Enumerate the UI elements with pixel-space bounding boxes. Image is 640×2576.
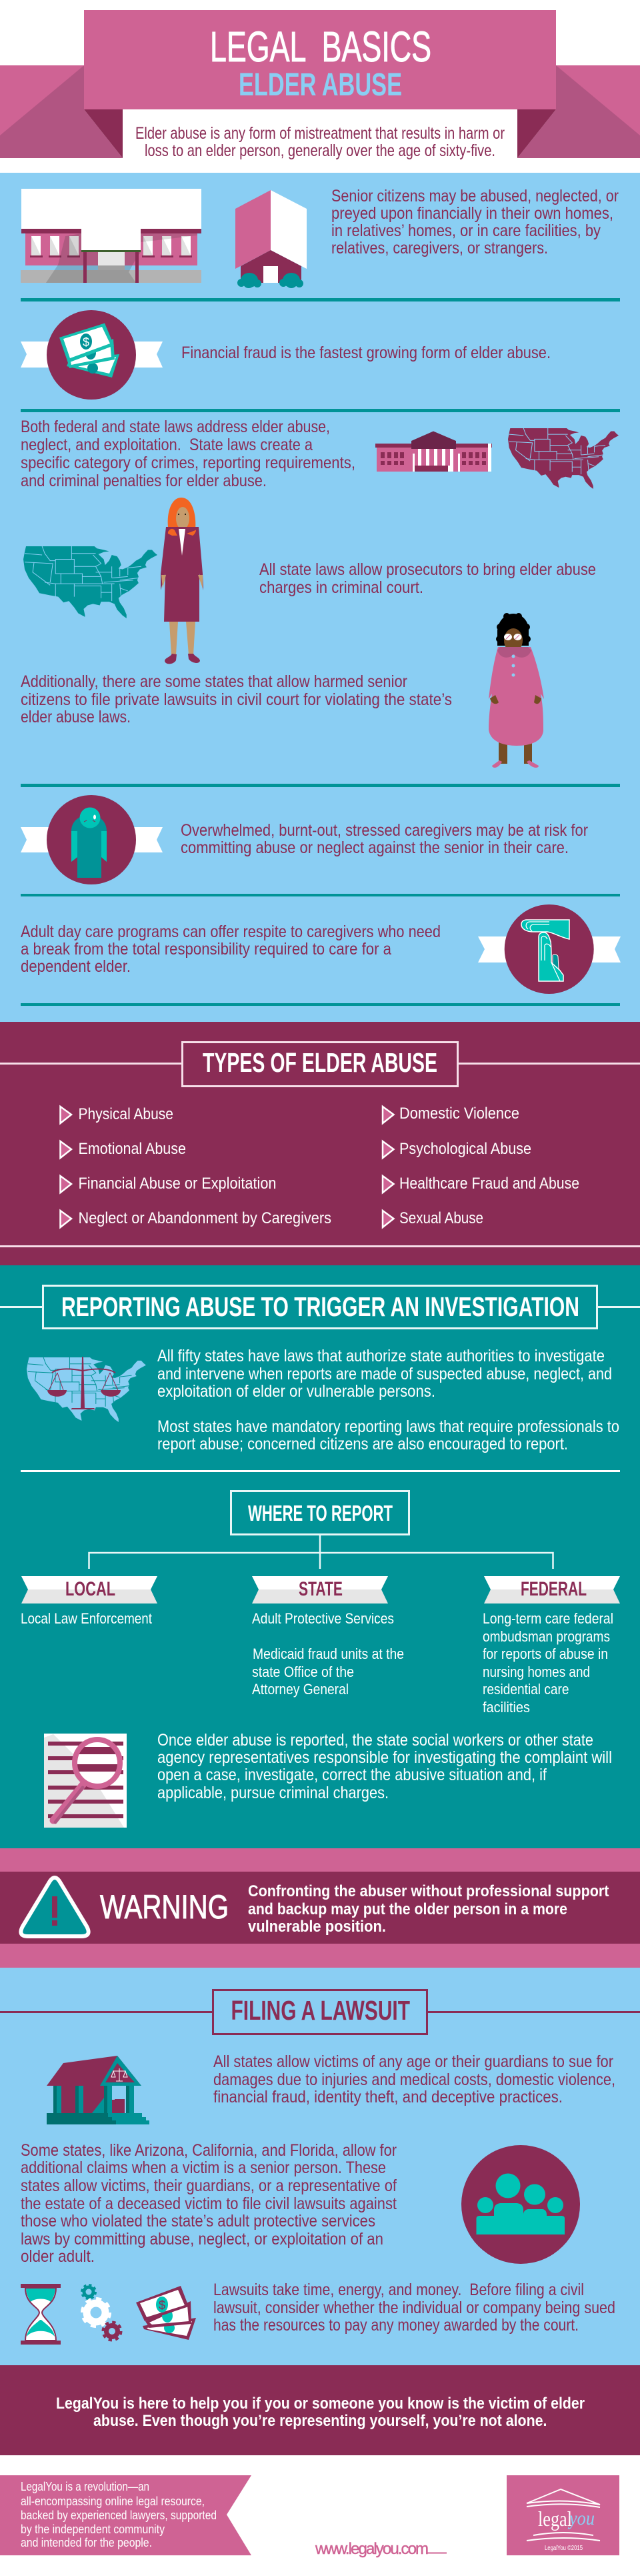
text: prosecutors: All state laws allow prosecutors to bring elder abuse	[259, 560, 596, 579]
callout: legalyou is here to help	[56, 2395, 585, 2430]
text: senior citizens	[331, 187, 619, 257]
footer ribbon	[0, 2475, 251, 2555]
logo: LegalYou ©2015	[545, 2545, 583, 2552]
text: warning: Confronting the abuser without professional support	[248, 1882, 609, 1900]
text: prosecutors: charges in criminal court.	[259, 578, 423, 597]
text: fifty states: exploitation of elder or vulnerable persons.	[157, 1382, 435, 1401]
text: lawsuits take time: has the resources to pay any money awarded by the court.	[213, 2316, 579, 2335]
text: private lawsuits	[21, 672, 452, 726]
list: left column	[60, 1105, 331, 1227]
heading: where to report	[231, 1491, 409, 1534]
text: all states allow victims	[213, 2052, 615, 2106]
badge: money	[21, 310, 163, 400]
banner: federal: FEDERAL	[521, 1578, 587, 1600]
text: private lawsuits: elder abuse laws.	[21, 708, 131, 726]
icon: money stack: $	[159, 2299, 165, 2312]
header ribbon	[0, 10, 640, 158]
badge: helping hand	[478, 904, 621, 994]
text: federal and state laws: specific category of crimes, reporting requirements,	[21, 454, 355, 472]
text: adult day care	[21, 922, 441, 976]
icon: warning triangle	[21, 1878, 89, 1936]
text: lawsuits take time: Lawsuits take time, energy, and money. Before filing a civil	[213, 2281, 584, 2299]
title: ELDER ABUSE	[239, 67, 402, 103]
text: warning: and backup may put the older person in a more	[248, 1900, 567, 1918]
figure: woman in maroon suit	[161, 498, 203, 664]
badge: money: $	[83, 336, 89, 349]
banner: federal	[484, 1576, 620, 1603]
title	[210, 23, 431, 103]
icon: document with magnifier	[44, 1734, 127, 1828]
text: additional claims: laws by committing abuse, neglect, or exploitation of an	[21, 2230, 383, 2248]
figure: woman in pink dress	[489, 613, 544, 768]
footer ribbon: by the independent community	[21, 2523, 165, 2536]
footer ribbon: backed by experienced lawyers, supported	[21, 2509, 217, 2522]
list: left column: Neglect or Abandonment by Caregivers	[79, 1209, 331, 1227]
banner: local	[21, 1576, 157, 1603]
text: additional claims	[21, 2141, 397, 2266]
text: federal and state laws: and criminal penalties for elder abuse.	[21, 472, 267, 490]
text: additional claims: the estate of a deceased victim to file civil lawsuits against	[21, 2194, 397, 2213]
heading: where to report: WHERE TO REPORT	[248, 1501, 393, 1525]
icon: teal US map	[23, 546, 157, 618]
footer ribbon: LegalYou is a revolution—an	[21, 2480, 149, 2493]
heading: filing a lawsuit	[0, 1990, 640, 2034]
connector lines	[89, 1535, 553, 1569]
text: state column: Adult Protective Services	[252, 1610, 394, 1627]
text: private lawsuits: Additionally, there are some states that allow harmed senior	[21, 672, 407, 691]
icon: care facility building	[21, 189, 201, 283]
intro text	[135, 124, 505, 160]
text: state column: Medicaid fraud units at the	[253, 1646, 404, 1662]
badge: stressed caregiver	[21, 795, 163, 884]
banner: state	[252, 1576, 388, 1603]
text: federal column: facilities	[483, 1699, 530, 1716]
text: federal and state laws: neglect, and exploitation. State laws create a	[21, 436, 313, 454]
text: caregivers	[181, 821, 588, 857]
icon: maroon US map	[508, 428, 619, 489]
intro text: Elder abuse is any form of mistreatment that results in harm or	[135, 124, 505, 143]
text: federal column: Long-term care federal	[483, 1610, 613, 1627]
heading: filing a lawsuit: FILING A LAWSUIT	[231, 1995, 410, 2026]
list: right column: Sexual Abuse	[399, 1209, 483, 1227]
list: right column: Healthcare Fraud and Abuse	[399, 1175, 579, 1193]
icon: gears	[81, 2285, 121, 2340]
website url: www.legalyou.com	[315, 2540, 429, 2558]
text: additional claims: additional claims when a victim is a senior person. These	[21, 2158, 386, 2177]
text: warning	[248, 1882, 609, 1936]
text: all states allow victims: financial fraud, identity theft, and deceptive practices.	[213, 2088, 563, 2106]
text: federal column: nursing homes and	[483, 1664, 590, 1680]
text: once reported: applicable, pursue criminal charges.	[157, 1784, 389, 1802]
logo	[507, 2475, 619, 2555]
text: adult day care: a break from the total responsibility required to care for a	[21, 940, 391, 958]
list: right column	[383, 1105, 579, 1227]
text: additional claims: older adult.	[21, 2247, 95, 2266]
icon: hourglass	[21, 2284, 61, 2345]
banner: state: STATE	[299, 1578, 343, 1600]
text: state column: Attorney General	[252, 1681, 349, 1698]
text: federal column: residential care	[483, 1681, 569, 1698]
footer ribbon: all-encompassing online legal resource,	[21, 2495, 205, 2508]
icon: house	[235, 190, 307, 288]
text: warning: vulnerable position.	[248, 1918, 386, 1936]
title: LEGAL BASICS	[210, 23, 431, 71]
text: caregivers: committing abuse or neglect against the senior in their care.	[181, 838, 569, 857]
banner: local: LOCAL	[65, 1578, 115, 1600]
text: additional claims: those who violated the state’s adult protective services	[21, 2212, 375, 2230]
text: fifty states	[157, 1347, 619, 1453]
text: additional claims: states allow victims, their guardians, or a representative of	[21, 2176, 397, 2195]
list: left column: Emotional Abuse	[79, 1140, 186, 1158]
text: adult day care: Adult day care programs can offer respite to caregivers who need	[21, 922, 441, 941]
callout: legalyou is here to help: LegalYou is here to help you if you or someone you know is the victim of elder	[56, 2395, 585, 2413]
text: adult day care: dependent elder.	[21, 957, 131, 976]
text: federal column: ombudsman programs	[483, 1628, 610, 1645]
list: left column: Physical Abuse	[79, 1105, 173, 1123]
icon: money stack	[136, 2286, 196, 2340]
footer ribbon: and intended for the people.	[21, 2536, 152, 2549]
heading: reporting abuse	[0, 1286, 640, 1329]
intro text: loss to an elder person, generally over the age of sixty-five.	[145, 141, 495, 160]
icon: courthouse with scales	[47, 2056, 149, 2124]
text: senior citizens: relatives, caregivers, or strangers.	[331, 239, 548, 257]
text: federal and state laws	[21, 418, 355, 490]
text: local column: Local Law Enforcement	[21, 1610, 152, 1627]
text: state column	[252, 1610, 404, 1698]
heading: types of elder abuse	[0, 1042, 640, 1086]
logo: you	[567, 2507, 595, 2529]
list: right column: Psychological Abuse	[399, 1140, 531, 1158]
text: private lawsuits: citizens to file private lawsuits in civil court for violating the state’s	[21, 690, 452, 709]
text: once reported: open a case, investigate, correct the abusive situation and, if	[157, 1766, 547, 1784]
text: fifty states: report abuse; concerned citizens are also encouraged to report.	[157, 1435, 568, 1453]
text: lawsuits take time	[213, 2281, 615, 2335]
icon: US map with scales	[27, 1357, 146, 1422]
text: senior citizens: in relatives’ homes, or in care facilities, by	[331, 221, 601, 240]
logo: legal	[538, 2507, 572, 2531]
heading: types of elder abuse: TYPES OF ELDER ABUSE	[203, 1047, 437, 1078]
list: right column: Domestic Violence	[399, 1105, 519, 1123]
text: prosecutors	[259, 560, 596, 597]
list: left column: Financial Abuse or Exploitation	[79, 1175, 276, 1193]
icon: group of people	[461, 2145, 580, 2264]
icon: courthouse	[375, 431, 492, 472]
callout: legalyou is here to help: abuse. Even though you’re representing yourself, you’re not alone.	[93, 2412, 547, 2430]
text: caregivers: Overwhelmed, burnt-out, stressed caregivers may be at risk for	[181, 821, 588, 840]
heading: warning: WARNING	[100, 1888, 229, 1926]
text: once reported	[157, 1731, 612, 1802]
text: federal and state laws: Both federal and state laws address elder abuse,	[21, 418, 330, 436]
panel: types of elder abuse	[0, 1042, 640, 1247]
text: state column: state Office of the	[252, 1664, 354, 1680]
text: financial fraud: Financial fraud is the fastest growing form of elder abuse.	[181, 344, 551, 362]
text: federal column: for reports of abuse in	[483, 1646, 608, 1662]
text: additional claims: Some states, like Arizona, California, and Florida, allow for	[21, 2141, 397, 2160]
text: federal column	[483, 1610, 613, 1716]
